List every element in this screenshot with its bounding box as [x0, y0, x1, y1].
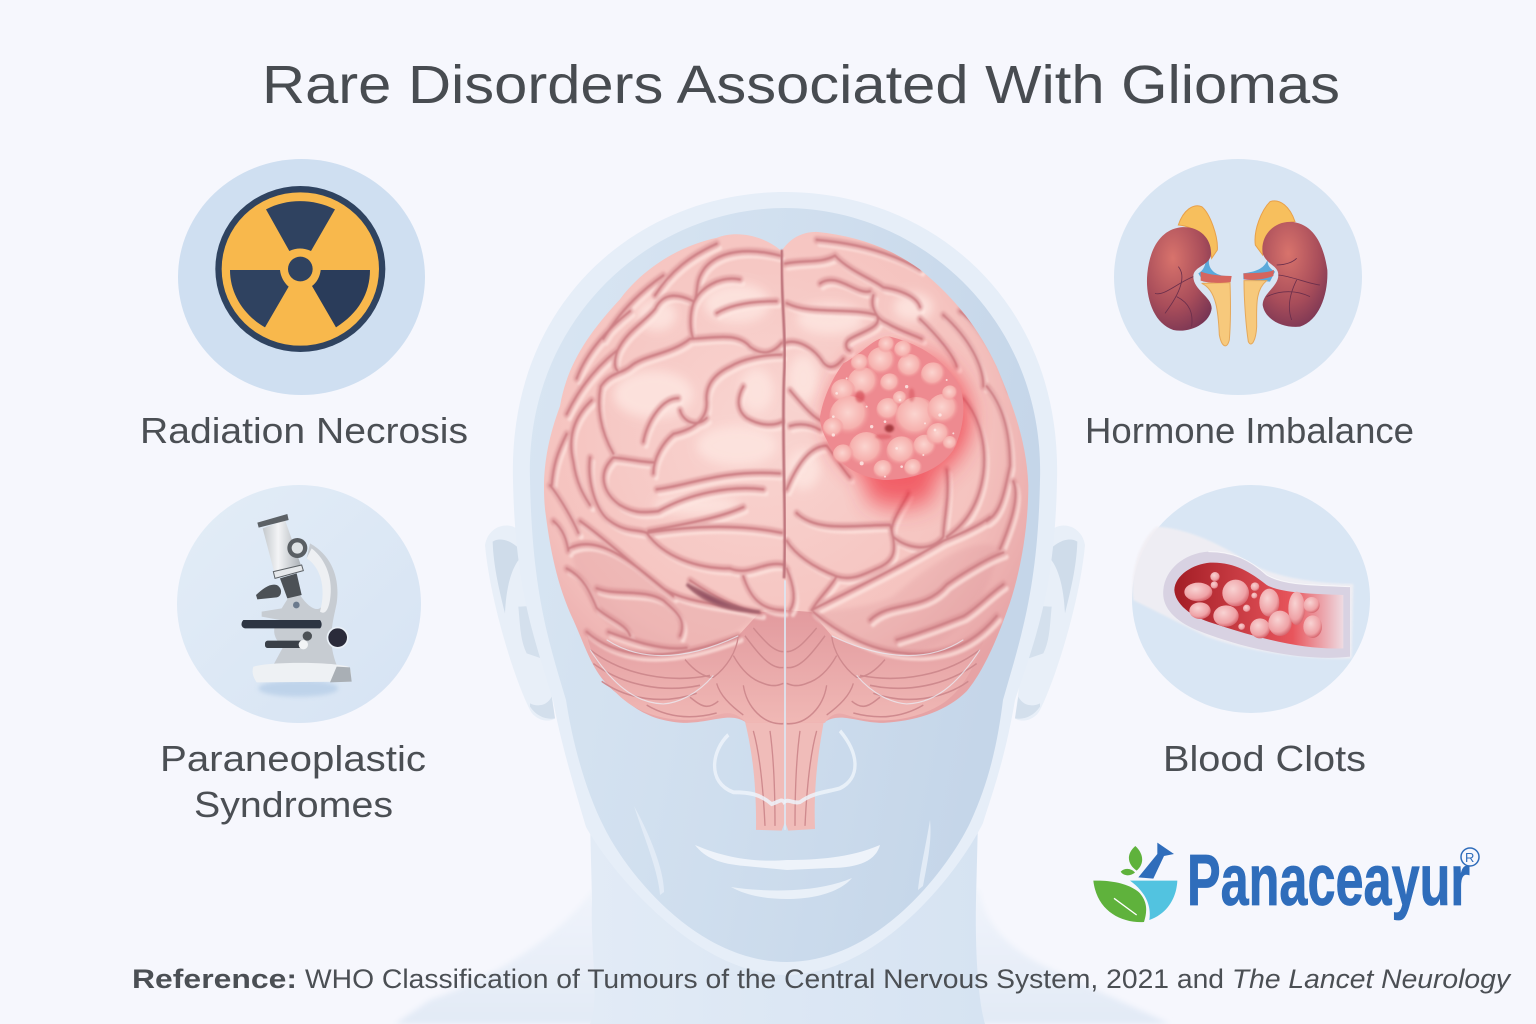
cerebellum: [587, 610, 987, 723]
inner face: [530, 208, 1040, 962]
label: radiation necrosis: Radiation Necrosis: [140, 410, 468, 451]
panel: paraneoplastic syndromes: [160, 485, 426, 825]
icon: radiation symbol: [215, 186, 385, 352]
icon: blood vessel with clots: [1133, 527, 1353, 659]
panel: radiation necrosis: [140, 159, 468, 451]
right temporal rim: [832, 636, 980, 704]
icon: kidneys: [1147, 201, 1327, 346]
label: paraneoplastic: Paraneoplastic: [160, 738, 426, 779]
head illustration: [395, 192, 1170, 1024]
left temporal rim: [590, 636, 738, 704]
logo: Panaceayur: [1093, 841, 1479, 922]
registered mark: R: [1465, 850, 1474, 865]
brain silhouette: [544, 232, 1028, 723]
tumour speckles: [832, 377, 954, 478]
neck: [590, 820, 985, 1024]
left cheek line: [634, 806, 664, 895]
brain illustration: [544, 232, 1028, 831]
midline light line: [782, 580, 787, 830]
icon backdrop: microscope: [177, 485, 421, 723]
sulci highlight right: [788, 244, 1018, 658]
occipital dark shadow: [687, 584, 760, 612]
icon: microscope: [242, 514, 352, 697]
icon backdrop: radiation: [178, 159, 425, 395]
nose outline: [715, 731, 855, 804]
registered mark: [1461, 848, 1479, 866]
title: Rare Disorders Associated With Gliomas: [262, 55, 1340, 115]
tumour crevices: [855, 388, 915, 439]
reference label: Reference:: [132, 964, 297, 994]
reference: [132, 964, 1512, 994]
left ear: [485, 525, 555, 721]
upper lip: [695, 845, 880, 870]
sulci highlight left: [553, 248, 786, 659]
longitudinal fissure: [782, 250, 785, 578]
right ear: [1015, 525, 1085, 721]
right sulci soft shadow: [785, 240, 1015, 654]
reference citation: WHO Classification of Tumours of the Central Nervous System, 2021 and The Lancet Neurology: [305, 964, 1512, 994]
gyri highlights: [613, 283, 933, 515]
shoulders: [395, 890, 1170, 1024]
brain sulci, clipped to the silhouette: [550, 240, 1018, 659]
icon backdrop: blood vessel: [1132, 485, 1370, 713]
left sulci: [550, 244, 783, 655]
icon backdrop: kidneys: [1114, 159, 1362, 395]
label: blood clots: Blood Clots: [1163, 738, 1366, 779]
panel: blood clots: [1132, 485, 1370, 779]
icon: mortar, pestle and leaf: [1093, 843, 1177, 922]
lower lip: [731, 878, 852, 899]
cerebellum left folds: [590, 628, 783, 826]
label: syndromes: Syndromes: [194, 784, 393, 825]
tumour glow: [828, 351, 972, 507]
panel: hormone imbalance: [1085, 159, 1414, 451]
brain stem: [743, 715, 825, 831]
right sulci: [785, 240, 1015, 654]
label: hormone imbalance: Hormone Imbalance: [1085, 410, 1414, 451]
shaded lower lobes: [570, 546, 761, 654]
left sulci soft shadow: [550, 244, 783, 655]
cerebellum right folds: [787, 628, 980, 826]
right cheek line: [918, 820, 931, 890]
head halo outline: [513, 192, 1057, 975]
tumour mass: [820, 336, 963, 480]
